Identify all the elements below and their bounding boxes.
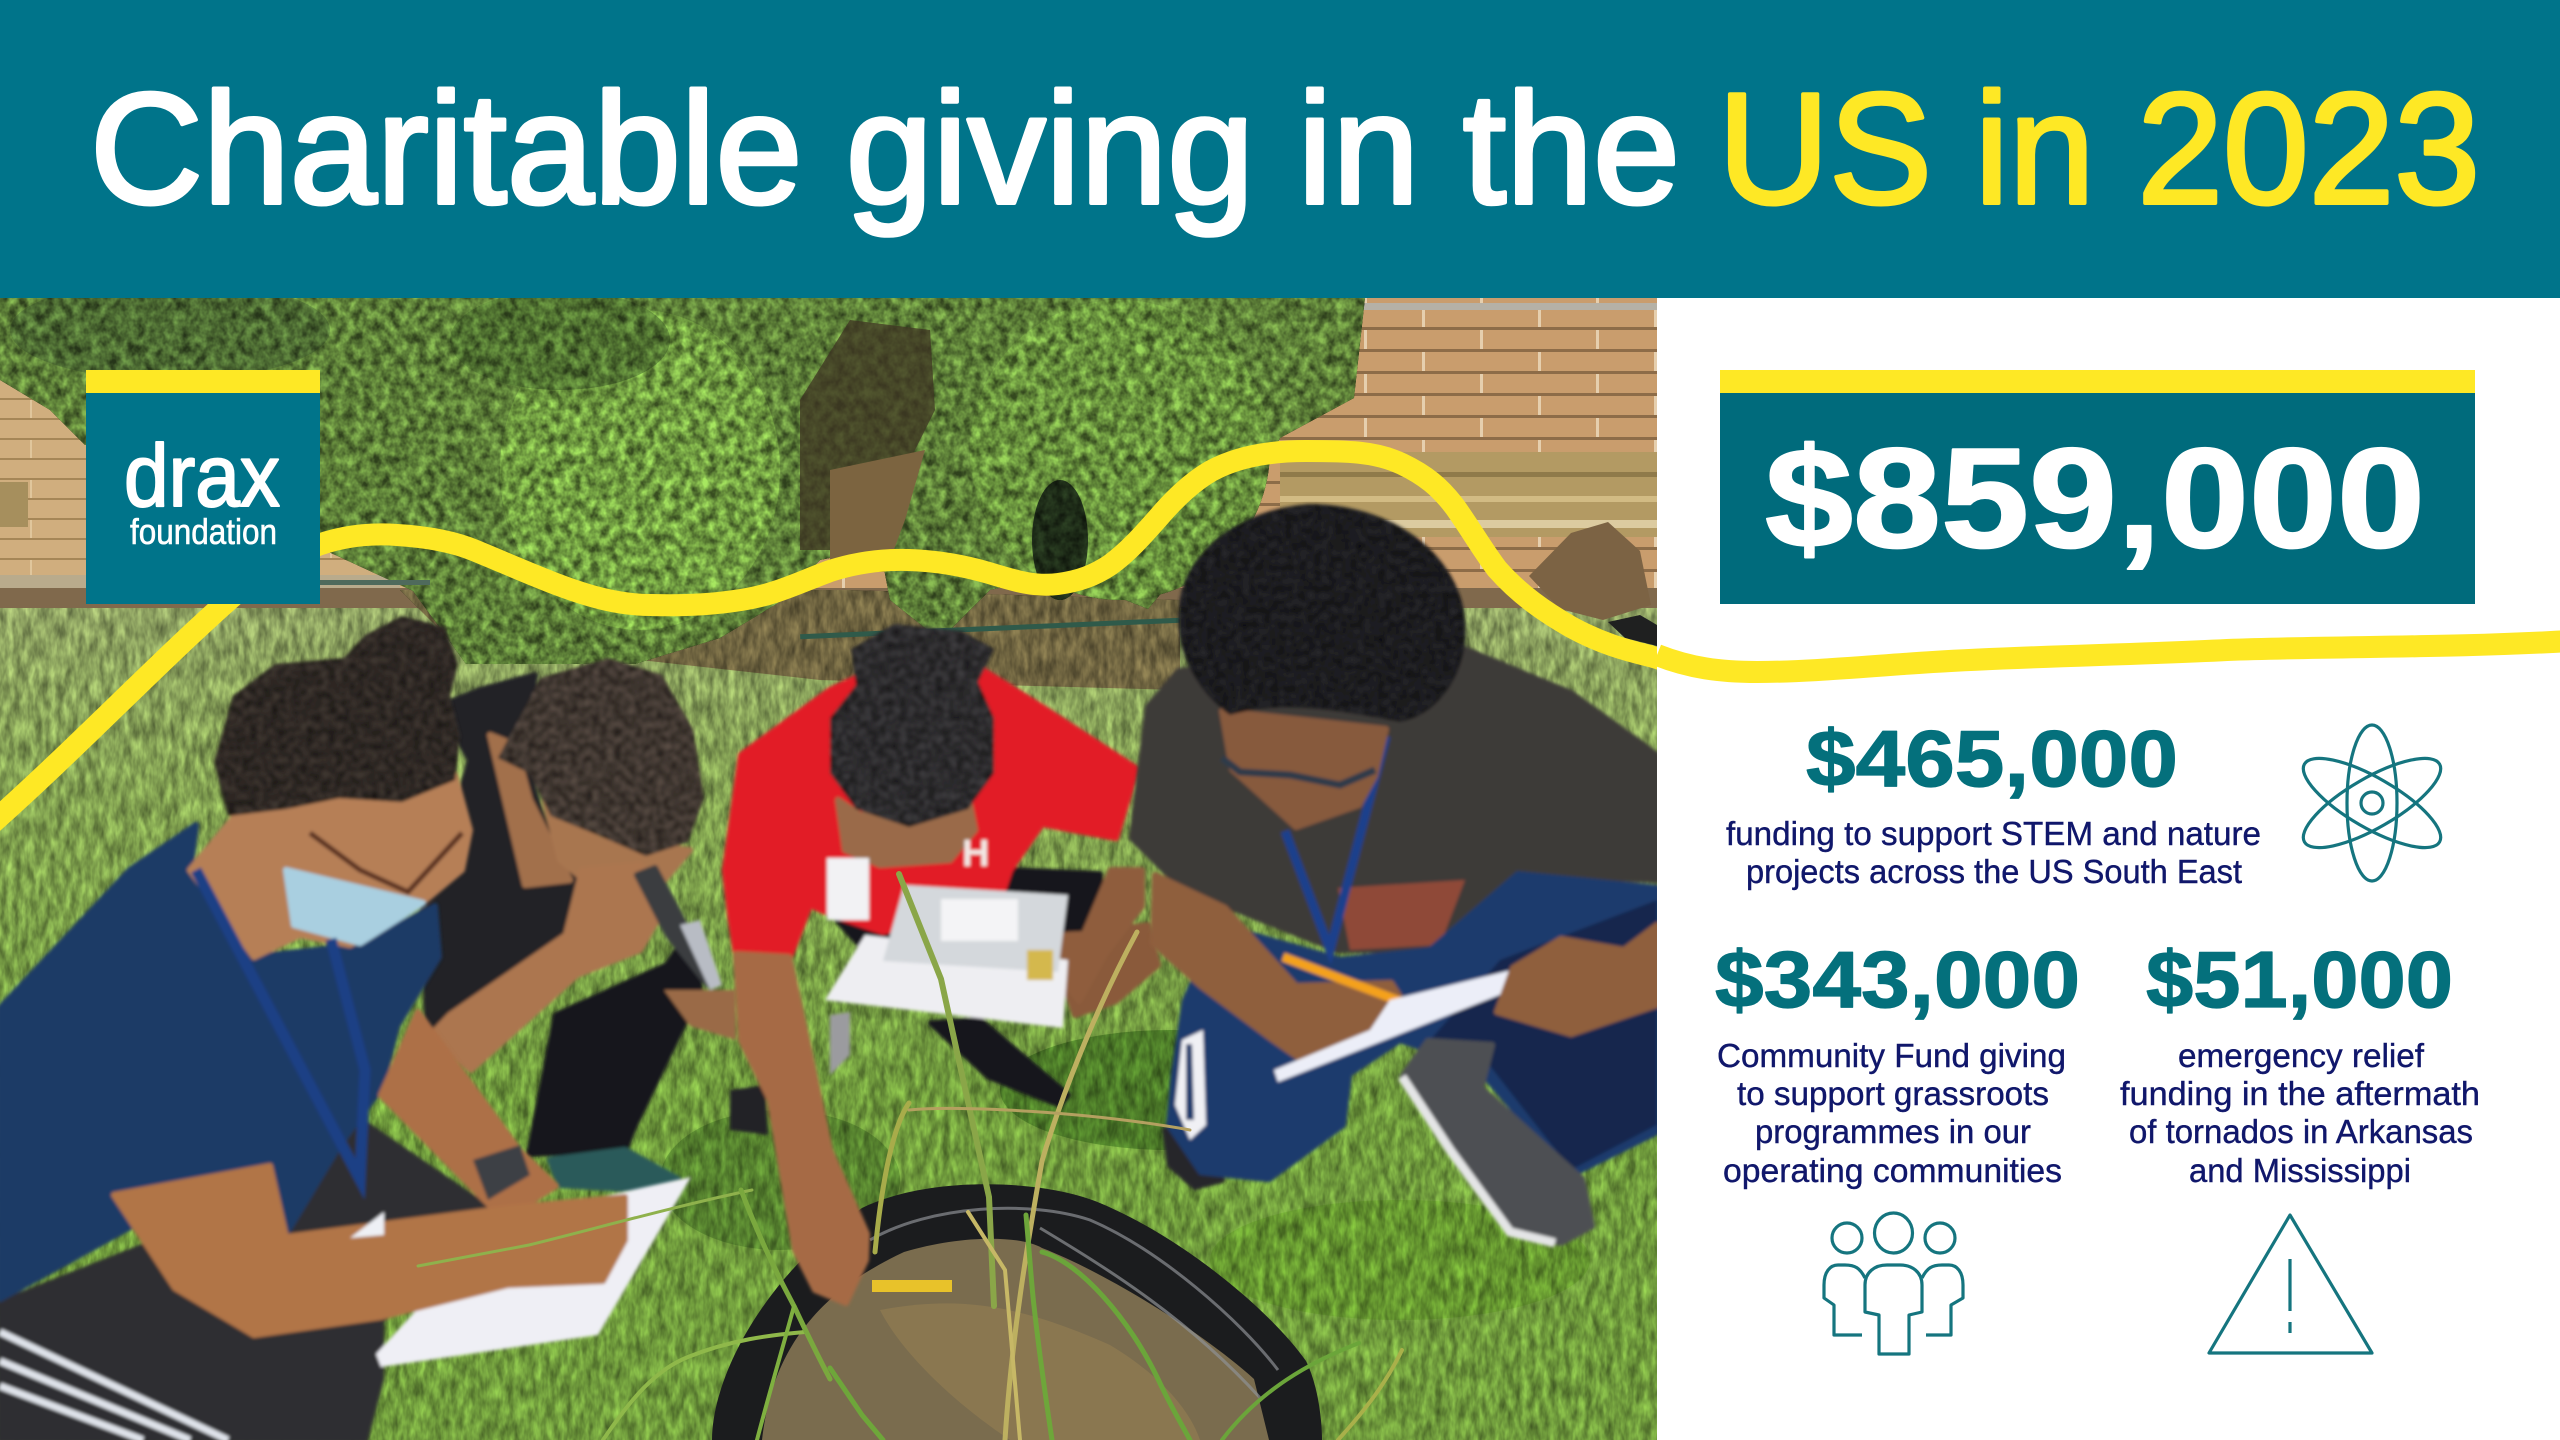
title: Charitable giving in the: [90, 61, 1680, 237]
icon: warning triangle: [2209, 1215, 2372, 1353]
title: US in 2023: [1718, 61, 2480, 237]
drax foundation logo: drax: [124, 426, 280, 525]
photo background: wall, ground, grass, shrub: [0, 280, 1657, 1440]
STEM funding block: funding to support STEM and nature: [1726, 815, 2261, 852]
STEM funding block: $465,000: [1806, 714, 2178, 803]
total amount box: $859,000: [1765, 419, 2425, 578]
icon: atom: [2292, 725, 2452, 881]
Community Fund block: to support grassroots: [1737, 1075, 2049, 1112]
emergency relief block: $51,000: [2146, 935, 2453, 1024]
drax foundation logo: foundation: [130, 511, 277, 552]
emergency relief block: emergency relief: [2178, 1037, 2425, 1074]
title: [90, 61, 2480, 237]
drax foundation logo: [86, 370, 320, 604]
tyre pond: [712, 1184, 1322, 1440]
person 2: black shirt with refractometer: [423, 658, 736, 1190]
yellow wave line: [0, 451, 2560, 825]
grass blades in the pond: [418, 874, 1402, 1440]
Community Fund block: operating communities: [1723, 1152, 2062, 1189]
Community Fund block: Community Fund giving: [1717, 1037, 2066, 1074]
STEM funding block: [1726, 714, 2261, 890]
emergency relief block: funding in the aftermath: [2120, 1075, 2480, 1112]
Community Fund block: programmes in our: [1755, 1113, 2031, 1150]
total amount box: [1720, 370, 2475, 604]
emergency relief block: of tornados in Arkansas: [2129, 1113, 2473, 1150]
emergency relief block: and Mississippi: [2189, 1152, 2411, 1189]
STEM funding block: projects across the US South East: [1746, 853, 2242, 890]
person 4: grey shirt with pencil and clipboard: [1132, 504, 1657, 1243]
Community Fund block: $343,000: [1715, 935, 2080, 1024]
header band: [0, 0, 2560, 298]
person 1: navy shirt with mask and clipboard: [0, 616, 691, 1440]
yellow wave over the white panel: [1657, 641, 2560, 672]
icon: people: [1824, 1213, 1963, 1354]
person 3: red shirt with clipboard: H: [962, 833, 989, 875]
Community Fund block: [1715, 935, 2080, 1189]
emergency relief block: [2120, 935, 2480, 1189]
person 3: red shirt with clipboard: [725, 624, 1158, 1303]
